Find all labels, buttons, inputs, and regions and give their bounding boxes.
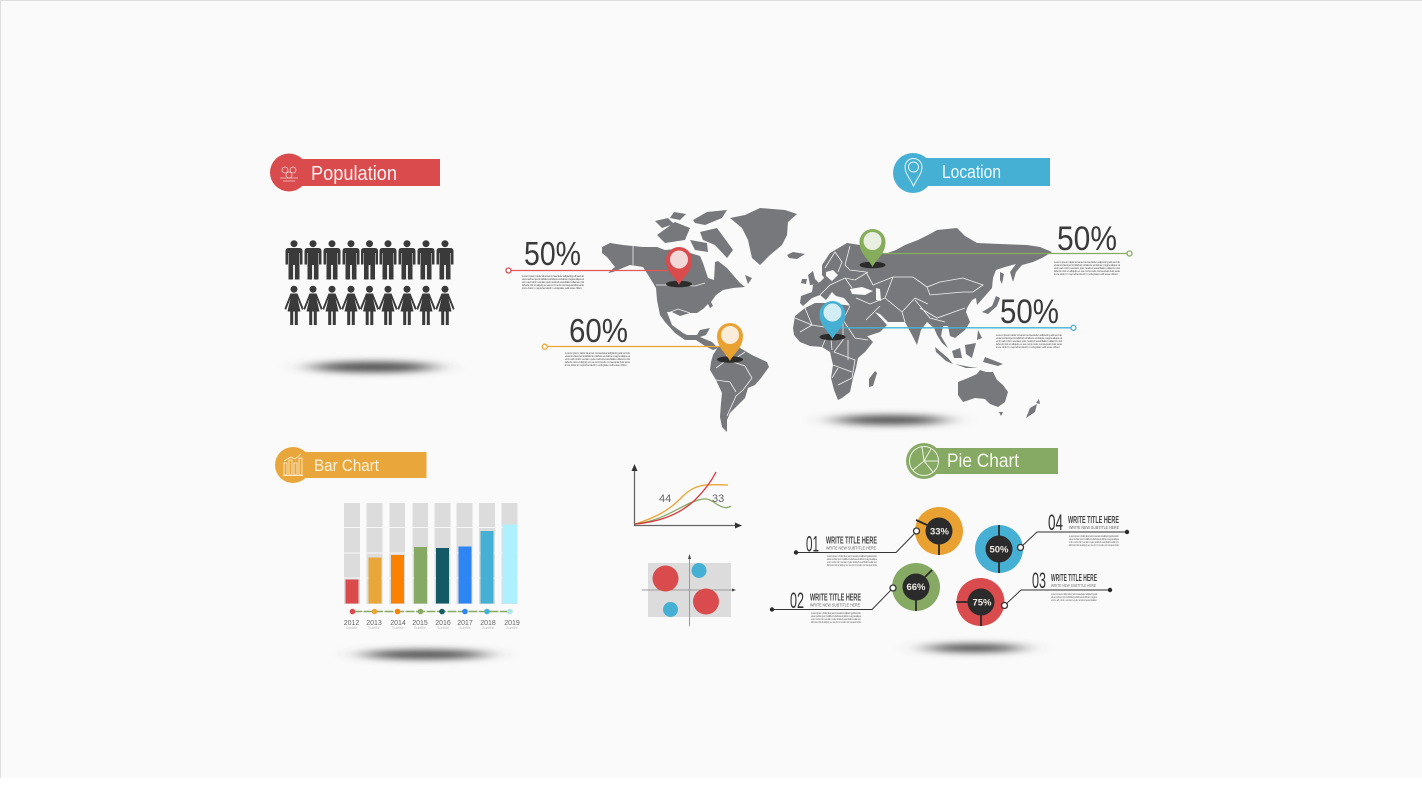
- year labels: 2016: [435, 620, 451, 627]
- year labels: 2019: [504, 620, 520, 627]
- australia: [958, 370, 1008, 407]
- item 03: enim ad minim veniam quis nostrud exercitation: [1051, 598, 1098, 602]
- callout: 50% africa: 50%: [1000, 293, 1059, 331]
- callout: 50% africa: enim ad minim veniam quis nostrud exercitation ullamco nisi: [996, 339, 1062, 343]
- item 02: laboris nisi ut aliquip ex ea commodo consequat duis: [811, 620, 862, 624]
- callout: 50% north america: [506, 235, 668, 290]
- donut: 50%: 50%: [989, 544, 1009, 556]
- icon: location pin: [905, 158, 922, 186]
- item 02: 02: [790, 588, 804, 613]
- year sublabels: Subtitle: [506, 626, 518, 630]
- callout: 50% africa: irure dolor in reprehenderit in voluptate velit esse cillum: [996, 345, 1061, 349]
- item 04: eiusmod tempor incididunt ut labore et dolore magna aliqua: [1069, 537, 1120, 541]
- panel: population: [270, 154, 454, 372]
- callout: 60% south america: irure dolor in reprehenderit in voluptate velit esse cillum: [565, 363, 628, 367]
- icon: pie: [910, 446, 938, 476]
- iceland: [787, 252, 805, 259]
- shadow: [834, 415, 946, 425]
- callout: 60% south america: 60%: [569, 312, 628, 349]
- item 03: 03: [1032, 568, 1046, 593]
- axes: [642, 554, 736, 626]
- icon: people group: [280, 167, 298, 181]
- heading: pie chart: Pie Chart: [947, 451, 1020, 472]
- bubbles: [652, 563, 719, 617]
- item 04: Lorem ipsum dolor sit amet consectetur adipiscing elit sed do: [1069, 534, 1120, 538]
- uk: [801, 271, 820, 285]
- callout: 50% africa: laboris nisi ut aliquip ex ea commodo consequat duis aute: [996, 342, 1062, 346]
- callout: 50% africa: [840, 293, 1076, 349]
- line chart: [632, 464, 742, 528]
- track dividers: [344, 528, 518, 578]
- item 01: [794, 528, 920, 567]
- item 04: WRITE NEW SUBTITLE HERE: [1069, 525, 1119, 530]
- item 01: Lorem ipsum dolor sit amet consectetur adipiscing elit sed do: [827, 554, 878, 558]
- heading: bar chart: [275, 447, 426, 483]
- year sublabels: Subtitle: [437, 626, 449, 630]
- eurasia: [800, 228, 1052, 348]
- callout: 50% russia: enim ad minim veniam quis nostrud exercitation ullamco nisi: [1054, 266, 1120, 270]
- icons: men row: [286, 240, 454, 280]
- callout: 50% russia: Lorem ipsum dolor sit amet consectetur adipiscing elit sed do: [1054, 260, 1120, 264]
- pin: blue: [820, 301, 846, 340]
- item 04: enim ad minim veniam quis nostrud exercitation ullamco: [1069, 540, 1120, 544]
- year sublabels: Subtitle: [368, 626, 380, 630]
- north america: [602, 243, 745, 350]
- callout: 50% north america: 50%: [524, 235, 581, 272]
- shadow: [926, 644, 1022, 652]
- year sublabels: Subtitle: [482, 626, 494, 630]
- donut: 75%: 75%: [972, 598, 992, 608]
- bars: [346, 524, 517, 604]
- item 04: [1018, 510, 1129, 550]
- pin: red: [666, 247, 692, 287]
- callout: 50% north america: irure dolor in reprehenderit in voluptate velit esse cillum: [522, 286, 583, 290]
- shadow: [363, 650, 487, 660]
- callout: 60% south america: enim ad minim veniam quis nostrud exercitation ullamco nisi: [565, 357, 630, 361]
- item 03: WRITE TITLE HERE: [1051, 572, 1097, 584]
- value labels: 44: [659, 493, 671, 505]
- callout: 60% south america: eiusmod tempor incididunt ut labore et dolore magna aliqua ut: [565, 354, 630, 358]
- item 02: [770, 585, 896, 624]
- year sublabels: Subtitle: [459, 626, 471, 630]
- heading: location: Location: [942, 162, 1001, 182]
- callout: 50% north america: laboris nisi ut aliquip ex ea commodo consequat duis aute: [522, 283, 584, 287]
- timeline: [350, 609, 513, 614]
- callout: 50% russia: [880, 220, 1132, 276]
- pin: green: [860, 229, 886, 268]
- greenland: [730, 208, 797, 265]
- islands of asia pacific: [869, 272, 1040, 418]
- callout: 60% south america: [542, 312, 720, 367]
- icon: rising bars: [283, 454, 303, 476]
- item 04: WRITE TITLE HERE: [1068, 514, 1119, 526]
- item 04: 04: [1048, 510, 1063, 535]
- heading: population: Population: [311, 163, 397, 185]
- callout: 50% north america: enim ad minim veniam quis nostrud exercitation ullamco nisi: [522, 280, 584, 284]
- donut: 50%: [975, 525, 1023, 573]
- donut: 66%: 66%: [906, 582, 926, 593]
- item 01: enim ad minim veniam quis nostrud exercitation ullamco: [827, 560, 878, 564]
- callout: 60% south america: Lorem ipsum dolor sit amet consectetur adipiscing elit sed do: [565, 351, 630, 355]
- year labels: 2018: [480, 620, 496, 627]
- icons: women row: [284, 286, 454, 325]
- item 01: 01: [806, 532, 819, 556]
- south america: [710, 343, 769, 432]
- item 03: [1002, 568, 1112, 608]
- item 02: eiusmod tempor incididunt ut labore et dolore magna aliqua: [811, 614, 862, 618]
- bar tracks: [344, 503, 518, 604]
- axes: [632, 464, 742, 528]
- callout: 50% russia: eiusmod tempor incididunt ut labore et dolore magna aliqua ut: [1054, 263, 1120, 267]
- year sublabels: [346, 626, 518, 630]
- callout: 50% north america: eiusmod tempor incididunt ut labore et dolore magna aliqua ut: [522, 277, 584, 281]
- line chart: 33: [712, 493, 724, 505]
- heading: bar chart: Bar Chart: [314, 456, 379, 475]
- curves: [635, 472, 731, 524]
- africa: [793, 303, 873, 400]
- item 02: WRITE NEW SUBTITLE HERE: [810, 602, 860, 608]
- item 03: eiusmod tempor incididunt ut labore et dolore magna: [1051, 595, 1098, 599]
- year sublabels: Subtitle: [392, 626, 404, 630]
- map country borders: [633, 246, 983, 416]
- item 01: WRITE TITLE HERE: [826, 534, 877, 546]
- callout: 50% russia: irure dolor in reprehenderit in voluptate velit esse cillum: [1054, 272, 1119, 276]
- callout: 50% north america: Lorem ipsum dolor sit amet consectetur adipiscing elit sed do: [522, 274, 584, 278]
- donut: 33%: 33%: [930, 526, 950, 538]
- pin: orange: [717, 323, 743, 363]
- item 03: WRITE NEW SUBTITLE HERE: [1051, 583, 1096, 588]
- panel: pie chart: [770, 443, 1129, 652]
- item 04: laboris nisi ut aliquip ex ea commodo consequat duis: [1069, 543, 1120, 547]
- item 01: laboris nisi ut aliquip ex ea commodo consequat duis: [827, 563, 878, 567]
- year sublabels: Subtitle: [346, 626, 357, 630]
- item 01: eiusmod tempor incididunt ut labore et dolore magna aliqua: [827, 557, 878, 561]
- world map: [602, 208, 1052, 432]
- callout: 50% africa: eiusmod tempor incididunt ut labore et dolore magna aliqua ut: [996, 336, 1062, 340]
- year labels: 2017: [457, 620, 473, 627]
- donut: 66%: [892, 563, 940, 611]
- year labels: 2014: [390, 620, 406, 627]
- callout: 50% africa: Lorem ipsum dolor sit amet consectetur adipiscing elit sed do: [996, 333, 1062, 337]
- year labels: 2015: [412, 620, 428, 627]
- year sublabels: Subtitle: [414, 626, 426, 630]
- year labels: 2013: [366, 620, 382, 627]
- callout: 50% russia: laboris nisi ut aliquip ex ea commodo consequat duis aute: [1054, 269, 1120, 273]
- shadow: [311, 362, 435, 372]
- callout: 50% russia: 50%: [1057, 220, 1117, 258]
- panel: bar chart: [275, 447, 520, 660]
- donut: 33%: [915, 507, 963, 555]
- item 02: Lorem ipsum dolor sit amet consectetur adipiscing elit sed do: [811, 611, 862, 615]
- panel: location map: [506, 153, 1132, 432]
- arctic islands: [655, 210, 752, 284]
- item 02: WRITE TITLE HERE: [810, 591, 861, 603]
- donut: 75%: [956, 578, 1004, 626]
- item 01: WRITE NEW SUBTITLE HERE: [826, 546, 876, 550]
- map seas: [850, 287, 881, 301]
- item 02: enim ad minim veniam quis nostrud exercitation ullamco: [811, 617, 862, 621]
- year labels: [344, 620, 520, 627]
- callout: 60% south america: laboris nisi ut aliquip ex ea commodo consequat duis aute: [565, 360, 630, 364]
- heading: location: [893, 153, 1050, 193]
- item 03: Lorem ipsum dolor sit amet consectetur adipiscing elit: [1051, 592, 1097, 596]
- quadrant chart: [642, 554, 736, 626]
- heading: population: [270, 154, 440, 192]
- heading: pie chart: [906, 443, 1058, 479]
- year labels: 2012: [344, 620, 359, 627]
